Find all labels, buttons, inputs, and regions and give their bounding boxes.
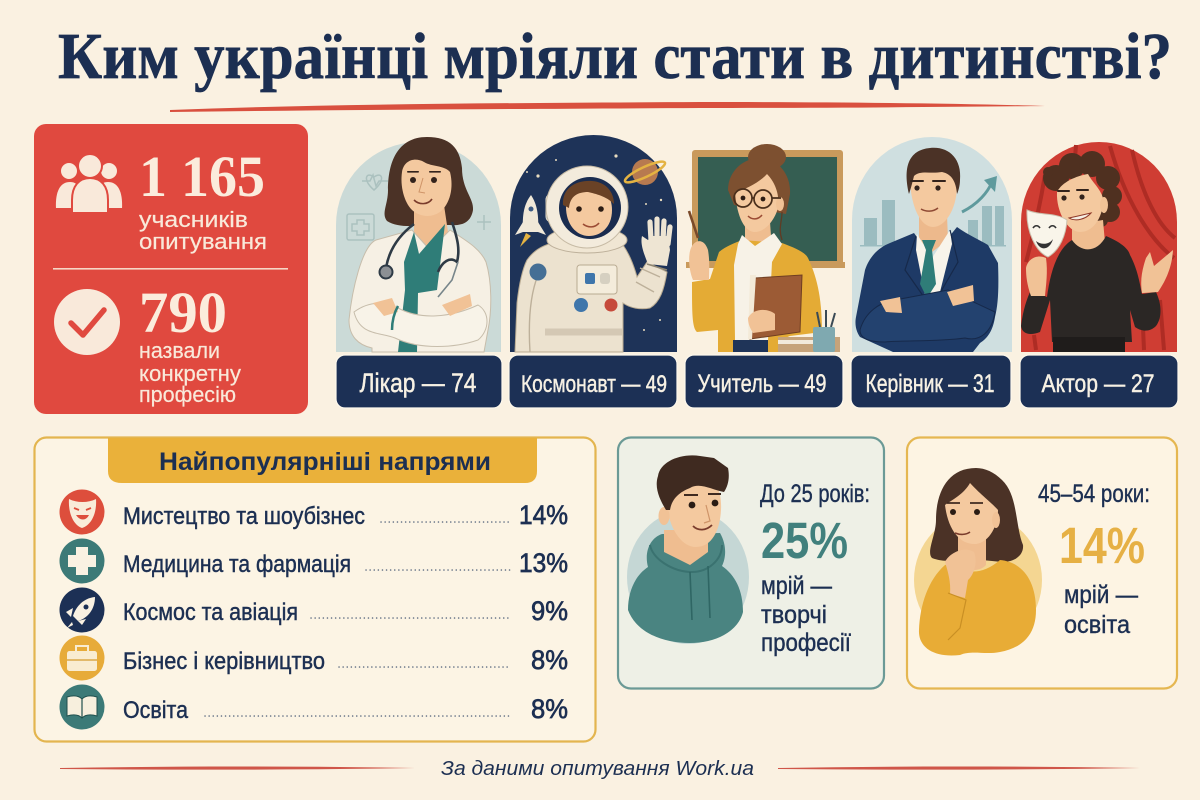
footer rule left: [60, 766, 415, 770]
icon: people: [55, 154, 123, 213]
text: under 25: 25%: [761, 512, 848, 569]
text: under 25: творчі: [761, 601, 827, 629]
row: arts: Мистецтво та шоубізнес: [123, 503, 365, 530]
text: under 25: [760, 480, 870, 657]
text: 45-54: 45–54 роки:: [1038, 480, 1150, 508]
actor curly hair: [1043, 151, 1122, 227]
label: actor: [1020, 355, 1178, 408]
card: actor: [1021, 142, 1177, 352]
card: manager: [852, 137, 1012, 352]
label: astronaut: [509, 355, 677, 408]
row: education: 8%: [531, 694, 568, 724]
row: space: Космос та авіація: [123, 599, 298, 626]
row: space: [60, 588, 568, 632]
icon: check: [54, 289, 120, 355]
label: astronaut: Космонавт — 49: [521, 371, 667, 398]
card: doctor: [336, 137, 501, 352]
label: teacher: [685, 355, 843, 408]
caption: named profession: конкретну: [139, 361, 241, 386]
row: business: 8%: [531, 645, 568, 675]
text: 45-54: 14%: [1059, 517, 1145, 574]
row: medicine: [60, 538, 568, 584]
row: business: [60, 636, 568, 680]
caption: participants: опитування: [139, 229, 267, 254]
teacher cardigan: [692, 240, 822, 352]
caption: named profession: професію: [139, 382, 236, 407]
card: astronaut: [510, 135, 677, 352]
row: business: Бізнес і керівництво: [123, 648, 325, 675]
label: teacher: Учитель — 49: [698, 370, 826, 398]
text: under 25: професії: [761, 629, 851, 657]
panel: popular directions: [34, 438, 596, 742]
number: participants: 1 165: [139, 144, 265, 209]
title underline: [170, 102, 1045, 112]
label: manager: [851, 355, 1011, 408]
footer source: За даними опитування Work.ua: [441, 758, 754, 780]
panel: survey totals: [34, 124, 308, 414]
caption: named profession: назвали: [139, 338, 220, 363]
row: medicine: Медицина та фармація: [123, 551, 351, 578]
label: actor: Актор — 27: [1042, 370, 1154, 398]
panel: 45-54: [907, 438, 1177, 688]
illustration: young man: [627, 455, 749, 644]
illustration: thinking woman: [914, 468, 1042, 656]
text: under 25: До 25 років:: [760, 480, 870, 508]
footer rule right: [778, 766, 1140, 770]
row: space: 9%: [531, 596, 568, 626]
card: teacher: [686, 144, 845, 352]
row: arts: [60, 490, 568, 534]
row: medicine: 13%: [519, 548, 568, 578]
text: 45-54: [1038, 480, 1150, 639]
label: manager: Керівник — 31: [866, 370, 994, 398]
row: education: Освіта: [123, 697, 189, 724]
row: education: [60, 684, 568, 730]
label: doctor: Лікар — 74: [360, 368, 476, 398]
text: under 25: мрій —: [761, 572, 832, 600]
number: named profession: 790: [139, 280, 227, 345]
row: arts: 14%: [519, 500, 568, 530]
label: doctor: [336, 355, 502, 408]
text: 45-54: освіта: [1064, 611, 1130, 639]
heading tab: Найпопулярніші напрями: [159, 448, 491, 476]
text: 45-54: мрій —: [1064, 581, 1138, 609]
caption: participants: учасників: [139, 207, 248, 232]
heading tab: [108, 438, 537, 483]
panel: under 25: [618, 438, 884, 688]
